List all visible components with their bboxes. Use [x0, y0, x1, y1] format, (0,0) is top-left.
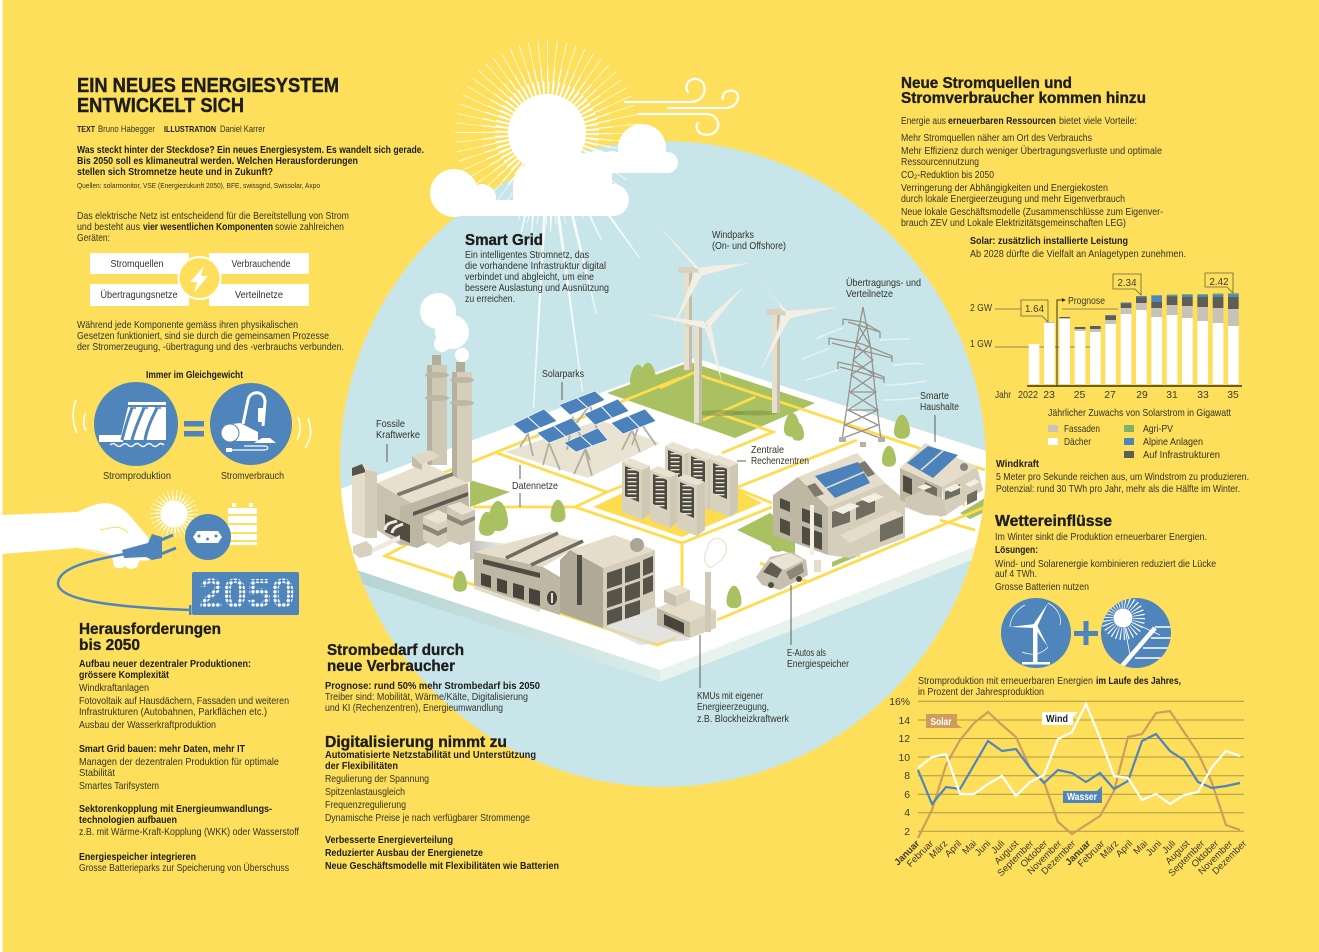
chart y axis labels: 4	[904, 808, 910, 819]
label: Solar	[926, 714, 962, 728]
panel: challenges until 2050: Aufbau neuer dezentraler Produktionen:	[79, 659, 251, 670]
chart month labels: Mai	[961, 838, 979, 857]
icon: plus	[1074, 621, 1098, 645]
title	[77, 75, 339, 117]
panel: electricity demand: neue Verbraucher	[327, 658, 455, 675]
chart month labels: November	[1196, 838, 1235, 877]
callouts: scene labels: Kraftwerke	[376, 430, 420, 441]
chart gridlines and GW labels	[970, 303, 1118, 350]
icon: hydro dam, production	[94, 382, 178, 466]
chart month labels: April	[943, 838, 964, 860]
labels: production and consumption: Stromproduktion	[103, 471, 171, 482]
text block: smart grid: Smart Grid	[465, 232, 543, 249]
text block: smart grid: Ein intelligentes Stromnetz, das	[465, 250, 589, 261]
icon: vacuum cleaner, consumption	[210, 383, 292, 465]
panel: new sources and consumers: Energie aus	[901, 116, 946, 127]
chart: forecast marker: Prognose	[1068, 296, 1105, 307]
panel: digitalisation: Reduzierter Ausbau der Energienetze	[325, 848, 483, 859]
chart heading	[918, 676, 1181, 698]
scene: fossil power plant	[352, 293, 520, 560]
callouts: scene labels: E-Autos als	[787, 648, 826, 659]
byline	[77, 124, 265, 134]
label: Wasser	[1063, 786, 1102, 803]
panel: new sources and consumers: durch lokale Energieerzeugung und mehr Eigenverbrauch	[901, 194, 1125, 205]
chart: forecast marker	[1057, 296, 1105, 386]
text block: smart grid: verbindet und abgleicht, um eine	[465, 272, 594, 283]
panel: challenges until 2050: Herausforderungen	[79, 621, 221, 638]
panel: new sources and consumers: Ressourcennutzung	[901, 157, 979, 168]
callouts: scene labels: Übertragungs- und	[846, 277, 921, 289]
chart: year axis labels: 25	[1074, 390, 1085, 401]
panel: challenges until 2050: Smart Grid bauen: mehr Daten, mehr IT	[79, 744, 246, 755]
chart legend: Alpine Anlagen	[1143, 437, 1203, 448]
illustration: hand, plug, socket, 2050 display	[2, 495, 299, 616]
panel: challenges until 2050: Windkraftanlagen	[79, 683, 149, 694]
panel: weather influences: Im Winter sinkt die Produktion erneuerbarer Energien.	[995, 532, 1207, 543]
chart: value callouts: 2.42	[1210, 277, 1229, 288]
text block: smart grid: bessere Auslastung und Ausnützung	[465, 283, 609, 294]
chart: value callouts: 2.34	[1118, 278, 1137, 289]
chart: year axis labels: 29	[1136, 390, 1148, 401]
text block: components intro: und besteht aus	[77, 222, 140, 233]
lead text: Quellen: solarmonitor, VSE (Energiezukunft 2050), BFE, swissgrid, Swissolar, Axpo	[77, 181, 320, 190]
labels: production and consumption: Stromverbrauch	[221, 471, 284, 482]
chart month labels: April	[1114, 838, 1135, 860]
chart heading: in Prozent der Jahresproduktion	[918, 687, 1044, 698]
series: wind	[918, 704, 1240, 804]
title: EIN NEUES ENERGIESYSTEM	[77, 75, 339, 97]
scene: green fields	[470, 362, 985, 567]
panel: weather influences: Grosse Batterien nutzen	[995, 582, 1089, 593]
text block: components intro: Geräten:	[77, 233, 110, 244]
panel: weather influences	[995, 513, 1216, 593]
chart month labels: September	[1166, 838, 1207, 879]
text block: smart grid	[465, 232, 609, 305]
lead text	[77, 145, 424, 190]
scene: trees	[453, 363, 910, 608]
chart y axis labels: 14	[898, 716, 910, 727]
chart legend: Fassaden	[1064, 424, 1100, 435]
panel: electricity demand: Treiber sind: Mobilität, Wärme/Kälte, Digitalisierung	[325, 692, 528, 703]
scene: data centre plot	[593, 490, 762, 537]
chart y axis labels: 8	[904, 771, 910, 782]
panel: challenges until 2050: grössere Komplexität	[79, 670, 169, 681]
callouts: scene labels: z.B. Blockheizkraftwerk	[697, 714, 790, 725]
series: water	[918, 734, 1240, 804]
panel: challenges until 2050: Stabilität	[79, 768, 115, 779]
text block: smart grid: die vorhandene Infrastruktur digital	[465, 261, 606, 272]
panel: challenges until 2050: Ausbau der Wasserkraftproduktion	[79, 720, 216, 731]
chart month labels: Mai	[1132, 838, 1150, 857]
scene: data centre racks	[622, 442, 738, 536]
chart month labels: August	[992, 838, 1021, 867]
text block: components intro: vier wesentlichen Komponenten	[143, 222, 273, 233]
panel: digitalisation: Frequenzregulierung	[325, 800, 406, 811]
chart month labels: Juli	[1160, 838, 1178, 856]
vibration arcs	[73, 400, 311, 448]
diagram: four grid components: Verteilnetze	[235, 290, 283, 301]
chart month labels: Oktober	[1018, 838, 1050, 870]
icon: equals sign	[184, 421, 204, 436]
panel: electricity demand: und KI (Rechenzentren), Energieumwandlung	[325, 703, 503, 714]
chart month labels: November	[1025, 838, 1064, 877]
chart month labels: Juni	[973, 838, 993, 858]
chart legend: Auf Infrastrukturen	[1143, 450, 1220, 461]
panel: new sources and consumers: Mehr Stromquellen näher am Ort des Verbrauchs	[901, 133, 1092, 144]
panel: digitalisation: der Flexibilitäten	[325, 761, 398, 772]
panel: digitalisation	[325, 734, 559, 872]
chart y axis labels: 6	[904, 790, 910, 801]
scene: solar park ground	[505, 420, 660, 478]
callouts: scene labels: Zentrale	[751, 445, 784, 456]
chart month labels: September	[995, 838, 1036, 879]
chart y axis labels: 2	[904, 827, 910, 838]
callouts: scene labels: KMUs mit eigener	[697, 691, 763, 702]
chart month labels: Dezember	[1039, 838, 1078, 877]
callouts: scene labels: Smarte	[920, 391, 949, 402]
chart y axis labels: 12	[898, 734, 910, 745]
chart: year axis labels: Jahr	[995, 390, 1011, 401]
panel: challenges until 2050: Sektorenkopplung mit Energieumwandlungs-	[79, 804, 272, 815]
chart legend	[1048, 408, 1231, 461]
heading: solar capacity: Ab 2028 dürfte die Vielfalt an Anlagetypen zunehmen.	[970, 249, 1186, 260]
panel: challenges until 2050: Smartes Tarifsystem	[79, 781, 159, 792]
diagram: four grid components: Stromquellen	[110, 259, 164, 270]
chart heading: Stromproduktion mit erneuerbaren Energien	[918, 676, 1093, 687]
text block: smart grid: zu erreichen.	[465, 294, 515, 305]
scene: isometric platform	[341, 226, 986, 682]
panel: challenges until 2050: technologien aufbauen	[79, 815, 177, 826]
text block: components explanation: der Stromerzeugung, -übertragung und des -verbrauchs verbunden.	[77, 342, 344, 353]
heading: solar capacity	[970, 236, 1186, 260]
panel: new sources and consumers: Neue lokale Geschäftsmodelle (Zusammenschlüsse zum Eigenver-	[901, 207, 1163, 218]
byline: Bruno Habegger	[98, 124, 155, 134]
chart legend: Dächer	[1064, 437, 1091, 448]
chart y axis labels: 10	[898, 753, 910, 764]
chart month labels: März	[1098, 838, 1121, 861]
chart month labels: Februar	[905, 838, 936, 870]
panel: new sources and consumers: Neue Stromquellen und	[901, 75, 1072, 92]
line chart: renewable production over the year	[889, 676, 1249, 879]
panel: digitalisation: Automatisierte Netzstabilität und Unterstützung	[325, 750, 536, 761]
lead text: stellen sich Stromnetze heute und in Zukunft?	[77, 167, 273, 178]
scene: factory	[474, 532, 690, 645]
chart y axis labels: 16%	[889, 697, 910, 708]
panel: challenges until 2050: Grosse Batterieparks zur Speicherung von Überschuss	[79, 862, 289, 874]
chart: year axis labels: 33	[1197, 390, 1209, 401]
chart: value callouts	[1021, 273, 1233, 322]
text block: wind power: Potenzial: rund 30 TWh pro Jahr, mehr als die Hälfte im Winter.	[996, 484, 1240, 495]
panel: digitalisation: Spitzenlastausgleich	[325, 787, 405, 798]
bar chart: solar additions	[970, 273, 1242, 401]
text block: components explanation: Während jede Komponente gemäss ihren physikalischen	[77, 320, 298, 331]
chart: year axis labels: 31	[1166, 390, 1178, 401]
chart month labels: März	[927, 838, 950, 861]
text block: wind power: 5 Meter pro Sekunde reichen aus, um Windstrom zu produzieren.	[996, 472, 1249, 483]
chart month labels: Oktober	[1189, 838, 1221, 870]
chart month labels: Juni	[1144, 838, 1164, 858]
panel: challenges until 2050: z.B. mit Wärme-Kraft-Kopplung (WKK) oder Wasserstoff	[79, 827, 299, 838]
panel: new sources and consumers	[901, 75, 1163, 229]
chart heading: im Laufe des Jahres,	[1096, 676, 1181, 687]
panel: electricity demand	[325, 642, 540, 714]
icon: sun with rays	[468, 54, 626, 212]
panel: new sources and consumers: brauch ZEV und Lokale Elektrizitätsgemeinschaften LEG)	[901, 218, 1126, 229]
byline: TEXT	[77, 124, 96, 134]
label: Wind: Wind	[1046, 714, 1068, 725]
icon: clouds	[430, 124, 678, 217]
labels: production and consumption	[103, 471, 284, 482]
panel: digitalisation: Digitalisierung nimmt zu	[325, 734, 507, 751]
callouts: scene labels: Energiespeicher	[787, 659, 849, 670]
chart y axis labels	[889, 697, 910, 838]
chart month labels: Januar	[892, 838, 922, 868]
series: solar	[918, 711, 1240, 838]
heading: balance: Immer im Gleichgewicht	[146, 370, 243, 381]
panel: digitalisation: Verbesserte Energieverteilung	[325, 835, 453, 846]
lead text: Bis 2050 soll es klimaneutral werden. Welchen Herausforderungen	[77, 156, 358, 167]
panel: new sources and consumers: CO₂-Reduktion bis 2050	[901, 170, 994, 181]
panel: new sources and consumers: Verringerung der Abhängigkeiten und Energiekosten	[901, 183, 1108, 194]
heading: solar capacity: Solar: zusätzlich installierte Leistung	[970, 236, 1128, 247]
callouts: scene labels: Windparks	[712, 230, 754, 241]
scene: electricity pylon	[802, 307, 927, 447]
illustration: hand, plug, socket, 2050 display: 2050	[199, 570, 295, 616]
chart: year axis labels: 2022	[1018, 390, 1038, 401]
panel: digitalisation: Regulierung der Spannung	[325, 774, 429, 785]
panel: digitalisation: Dynamische Preise je nach verfügbarer Strommenge	[325, 813, 530, 824]
callouts: scene labels: Verteilnetze	[846, 289, 893, 300]
chart month labels: August	[1163, 838, 1192, 867]
chart month labels	[892, 838, 1249, 879]
chart month labels: Dezember	[1210, 838, 1249, 877]
byline: Daniel Karrer	[220, 124, 265, 134]
panel: challenges until 2050: Infrastrukturen (Autobahnen, Parkflächen etc.)	[79, 707, 267, 718]
title: ENTWICKELT SICH	[77, 95, 244, 117]
panel: weather influences: Wettereinflüsse	[995, 513, 1112, 530]
chart: year axis labels: 35	[1227, 390, 1239, 401]
panel: challenges until 2050	[79, 621, 299, 874]
callouts: scene labels: Haushalte	[920, 402, 959, 413]
panel: new sources and consumers: erneuerbaren Ressourcen	[948, 116, 1056, 127]
panel: weather influences: Lösungen:	[995, 545, 1038, 556]
callouts: scene labels	[376, 230, 959, 725]
scene: road network	[385, 373, 985, 645]
panel: weather influences: auf 4 TWh.	[995, 569, 1037, 580]
icon: sun rays below cloud	[519, 216, 640, 408]
label: Wind	[1042, 712, 1078, 725]
callouts: scene labels: Datennetze	[512, 481, 558, 492]
scene: large house with solar roof	[773, 453, 905, 558]
panel: challenges until 2050: Energiespeicher integrieren	[79, 852, 196, 863]
icon: wind swirls	[625, 79, 738, 135]
byline: ILLUSTRATION	[164, 124, 216, 134]
scene: small house with solar roof	[900, 443, 983, 517]
diagram: four grid components: Übertragungsnetze	[100, 289, 178, 301]
label: Solar: Solar	[930, 717, 952, 728]
panel: electricity demand: Prognose: rund 50% mehr Strombedarf bis 2050	[325, 681, 540, 692]
chart: year axis labels: 27	[1104, 390, 1116, 401]
callouts: scene labels: Rechenzentren	[751, 456, 809, 467]
chart gridlines	[918, 701, 1244, 831]
chart gridlines and GW labels: 1 GW	[970, 339, 992, 350]
chart legend: Agri-PV	[1143, 424, 1173, 435]
chart month labels: Februar	[1076, 838, 1107, 870]
text block: components explanation: Gesetzen funktioniert, sind sie durch die gemeinsamen Prozesse	[77, 331, 329, 342]
panel: electricity demand: Strombedarf durch	[327, 642, 464, 659]
callouts: scene labels: Energieerzeugung,	[697, 702, 769, 713]
panel: new sources and consumers: bietet viele Vorteile:	[1059, 116, 1137, 127]
panel: new sources and consumers: Stromverbraucher kommen hinzu	[901, 90, 1146, 107]
scene: electric car	[756, 552, 821, 590]
panel: new sources and consumers: Mehr Effizienz durch weniger Übertragungsverluste und optimale	[901, 145, 1162, 157]
diagram: four grid components: Verbrauchende	[232, 259, 291, 270]
panel: weather influences: Wind- und Solarenergie kombinieren reduziert die Lücke	[995, 559, 1216, 570]
panel: challenges until 2050: Fotovoltaik auf Hausdächern, Fassaden und weiteren	[79, 696, 289, 707]
scene: combined heat and power unit	[657, 538, 727, 638]
panel: challenges until 2050: bis 2050	[79, 637, 140, 654]
panel: challenges until 2050: Managen der dezentralen Produktion für optimale	[79, 757, 279, 768]
chart: year axis labels: 23	[1043, 390, 1055, 401]
text block: components intro: Das elektrische Netz ist entscheidend für die Bereitstellung von Strom	[77, 211, 349, 222]
chart: year axis labels	[995, 390, 1239, 401]
chart: value callouts: 1.64	[1025, 304, 1044, 315]
diagram: four grid components	[90, 253, 309, 306]
icon: solar circle	[1101, 598, 1175, 668]
text block: components intro: sowie zahlreichen	[275, 222, 344, 233]
callouts: scene labels: Solarparks	[542, 369, 584, 380]
icon: wind turbine circle	[1001, 598, 1071, 668]
text block: components explanation	[77, 320, 344, 353]
chart month labels: Januar	[1063, 838, 1093, 868]
label: Wasser: Wasser	[1067, 792, 1097, 803]
scene: wind turbines	[648, 225, 838, 423]
panel: central scene circle	[340, 141, 986, 787]
lead text: Was steckt hinter der Steckdose? Ein neues Energiesystem. Es wandelt sich gerade.	[77, 145, 424, 156]
scene: solar panels	[513, 391, 656, 476]
callouts: scene labels: Fossile	[376, 419, 405, 430]
chart month labels: Juli	[989, 838, 1007, 856]
chart gridlines and GW labels: 2 GW	[970, 303, 992, 314]
text block: wind power	[996, 459, 1249, 495]
text block: wind power: Windkraft	[996, 459, 1039, 470]
callouts: scene labels: (On- und Offshore)	[712, 241, 786, 252]
panel: digitalisation: Neue Geschäftsmodelle mit Flexibilitäten wie Batterien	[325, 861, 559, 872]
text block: components intro	[77, 211, 349, 244]
chart legend: Jährlicher Zuwachs von Solarstrom in Gigawatt	[1048, 408, 1231, 419]
